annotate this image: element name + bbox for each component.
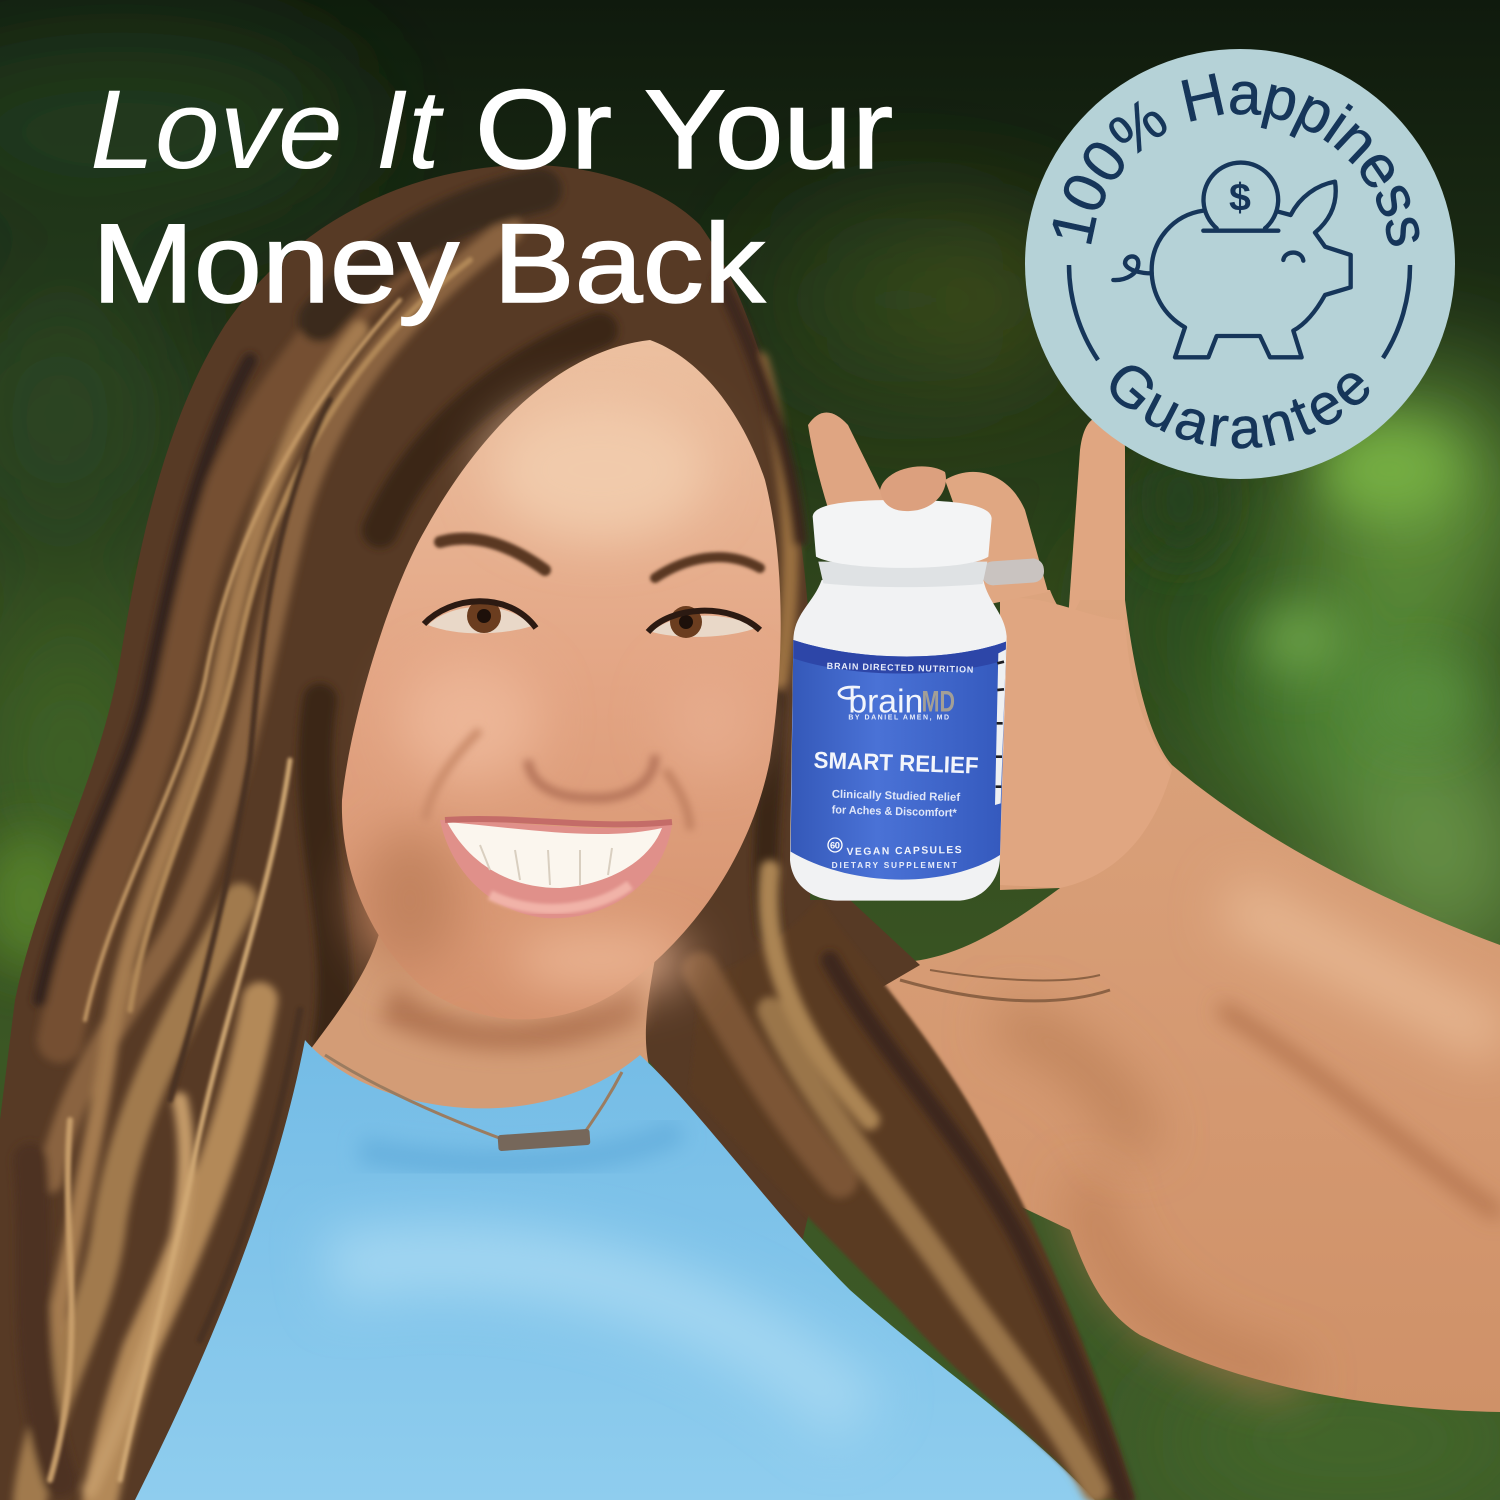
thumb over cap xyxy=(880,466,946,511)
nose xyxy=(425,730,690,830)
supplement bottle: Clinically Studied Relief xyxy=(832,789,960,804)
brainMD logo: brain xyxy=(848,684,923,721)
icon: piggy bank with coin xyxy=(1113,163,1351,357)
supplement bottle: for Aches & Discomfort* xyxy=(832,804,957,820)
badge top text: 100% Happiness xyxy=(1052,73,1420,246)
neck and chest xyxy=(310,930,660,1120)
index finger behind badge xyxy=(1068,416,1125,620)
supplement facts panel xyxy=(995,649,1006,805)
smile xyxy=(440,819,672,918)
supplement bottle: VEGAN CAPSULES xyxy=(847,845,962,858)
bottle cap xyxy=(813,500,992,568)
eyebrows xyxy=(440,539,760,578)
face xyxy=(342,340,781,1019)
brainMD logo: BY DANIEL AMEN, MD xyxy=(848,714,950,721)
bottle body xyxy=(790,580,1007,901)
title: Money Back xyxy=(92,201,766,326)
title xyxy=(90,67,893,326)
hair falling over shoulder xyxy=(690,870,1135,1500)
raised arm and hand xyxy=(800,412,1500,1412)
necklace xyxy=(325,1055,622,1142)
brainMD logo xyxy=(839,684,955,721)
label header band xyxy=(793,640,1006,674)
supplement bottle: 60 xyxy=(830,841,840,851)
brainMD logo: MD xyxy=(922,686,955,719)
bottle neck xyxy=(818,562,987,587)
badge side arcs xyxy=(1069,265,1410,360)
ring on finger xyxy=(981,558,1045,586)
badge bottom text: Guarantee xyxy=(1110,366,1370,449)
blue label xyxy=(791,640,1006,880)
hair behind the face xyxy=(0,165,920,1500)
supplement bottle xyxy=(790,500,1007,901)
supplement bottle: SMART RELIEF xyxy=(813,747,979,779)
supplement bottle: BRAIN DIRECTED NUTRITION xyxy=(827,661,974,675)
title: Or Your xyxy=(475,67,893,192)
supplement bottle: DIETARY SUPPLEMENT xyxy=(832,860,957,870)
eyes xyxy=(424,599,760,638)
light blue sleeveless top xyxy=(135,1040,1095,1500)
title: Love It xyxy=(90,67,444,192)
guarantee badge xyxy=(1025,49,1455,479)
icon: piggy bank with coin: $ xyxy=(1229,176,1251,220)
